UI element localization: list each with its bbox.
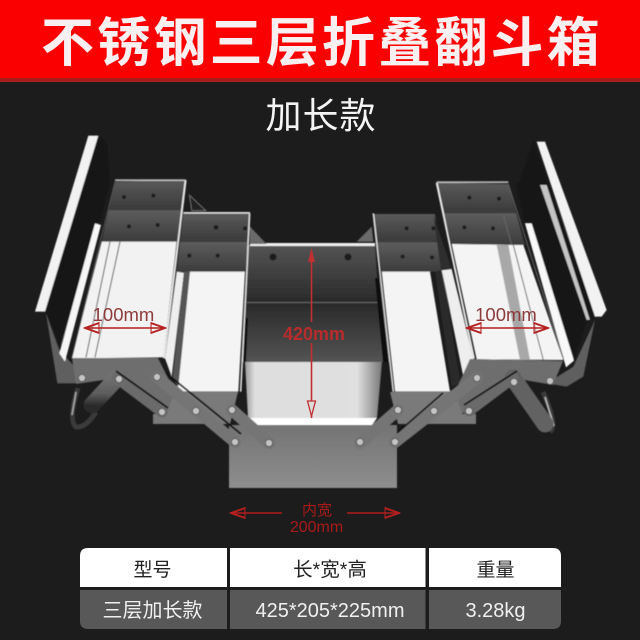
dimension: center length (283, 248, 345, 418)
rivets (78, 374, 554, 446)
table data row (80, 590, 561, 629)
tray 1 front panels (72, 358, 175, 414)
subtitle: 加长款 (265, 95, 377, 136)
dimension: inner width: 内宽 (302, 502, 332, 519)
dimension: center length: 420mm (283, 324, 345, 344)
dimension: left tray width (85, 304, 165, 328)
center compartment (241, 243, 389, 425)
illustration: folding toolbox (35, 136, 607, 488)
table header row: 重量 (476, 559, 515, 581)
dimension: inner width: 200mm (290, 519, 343, 536)
right lid (517, 142, 607, 387)
table header row (80, 548, 561, 587)
left tray 1 (59, 179, 186, 362)
box front (229, 425, 397, 488)
right tray 1 (437, 181, 574, 367)
table data row: 3.28kg (465, 600, 526, 622)
short links (232, 410, 398, 443)
left lid (35, 136, 109, 383)
long links (157, 377, 477, 442)
dimension: inner width (231, 502, 399, 536)
table header row: 长*宽*高 (293, 559, 367, 581)
left tray 2 (165, 195, 267, 392)
table data row: 三层加长款 (102, 599, 202, 622)
title: 不锈钢三层折叠翻斗箱 (41, 14, 603, 73)
dimension: right tray width (467, 304, 548, 328)
header banner (0, 0, 640, 82)
v-shaped links (92, 378, 117, 405)
table header row: 型号 (133, 559, 172, 581)
right tray 2 (357, 213, 473, 392)
specification table (80, 548, 561, 629)
front panels and hinge arms (72, 358, 563, 488)
table data row: 425*205*225mm (256, 600, 404, 622)
dimension: left tray width: 100mm (93, 304, 154, 325)
dimension: right tray width: 100mm (475, 304, 537, 325)
tray 2 front panels (153, 392, 238, 424)
handles (72, 388, 96, 427)
